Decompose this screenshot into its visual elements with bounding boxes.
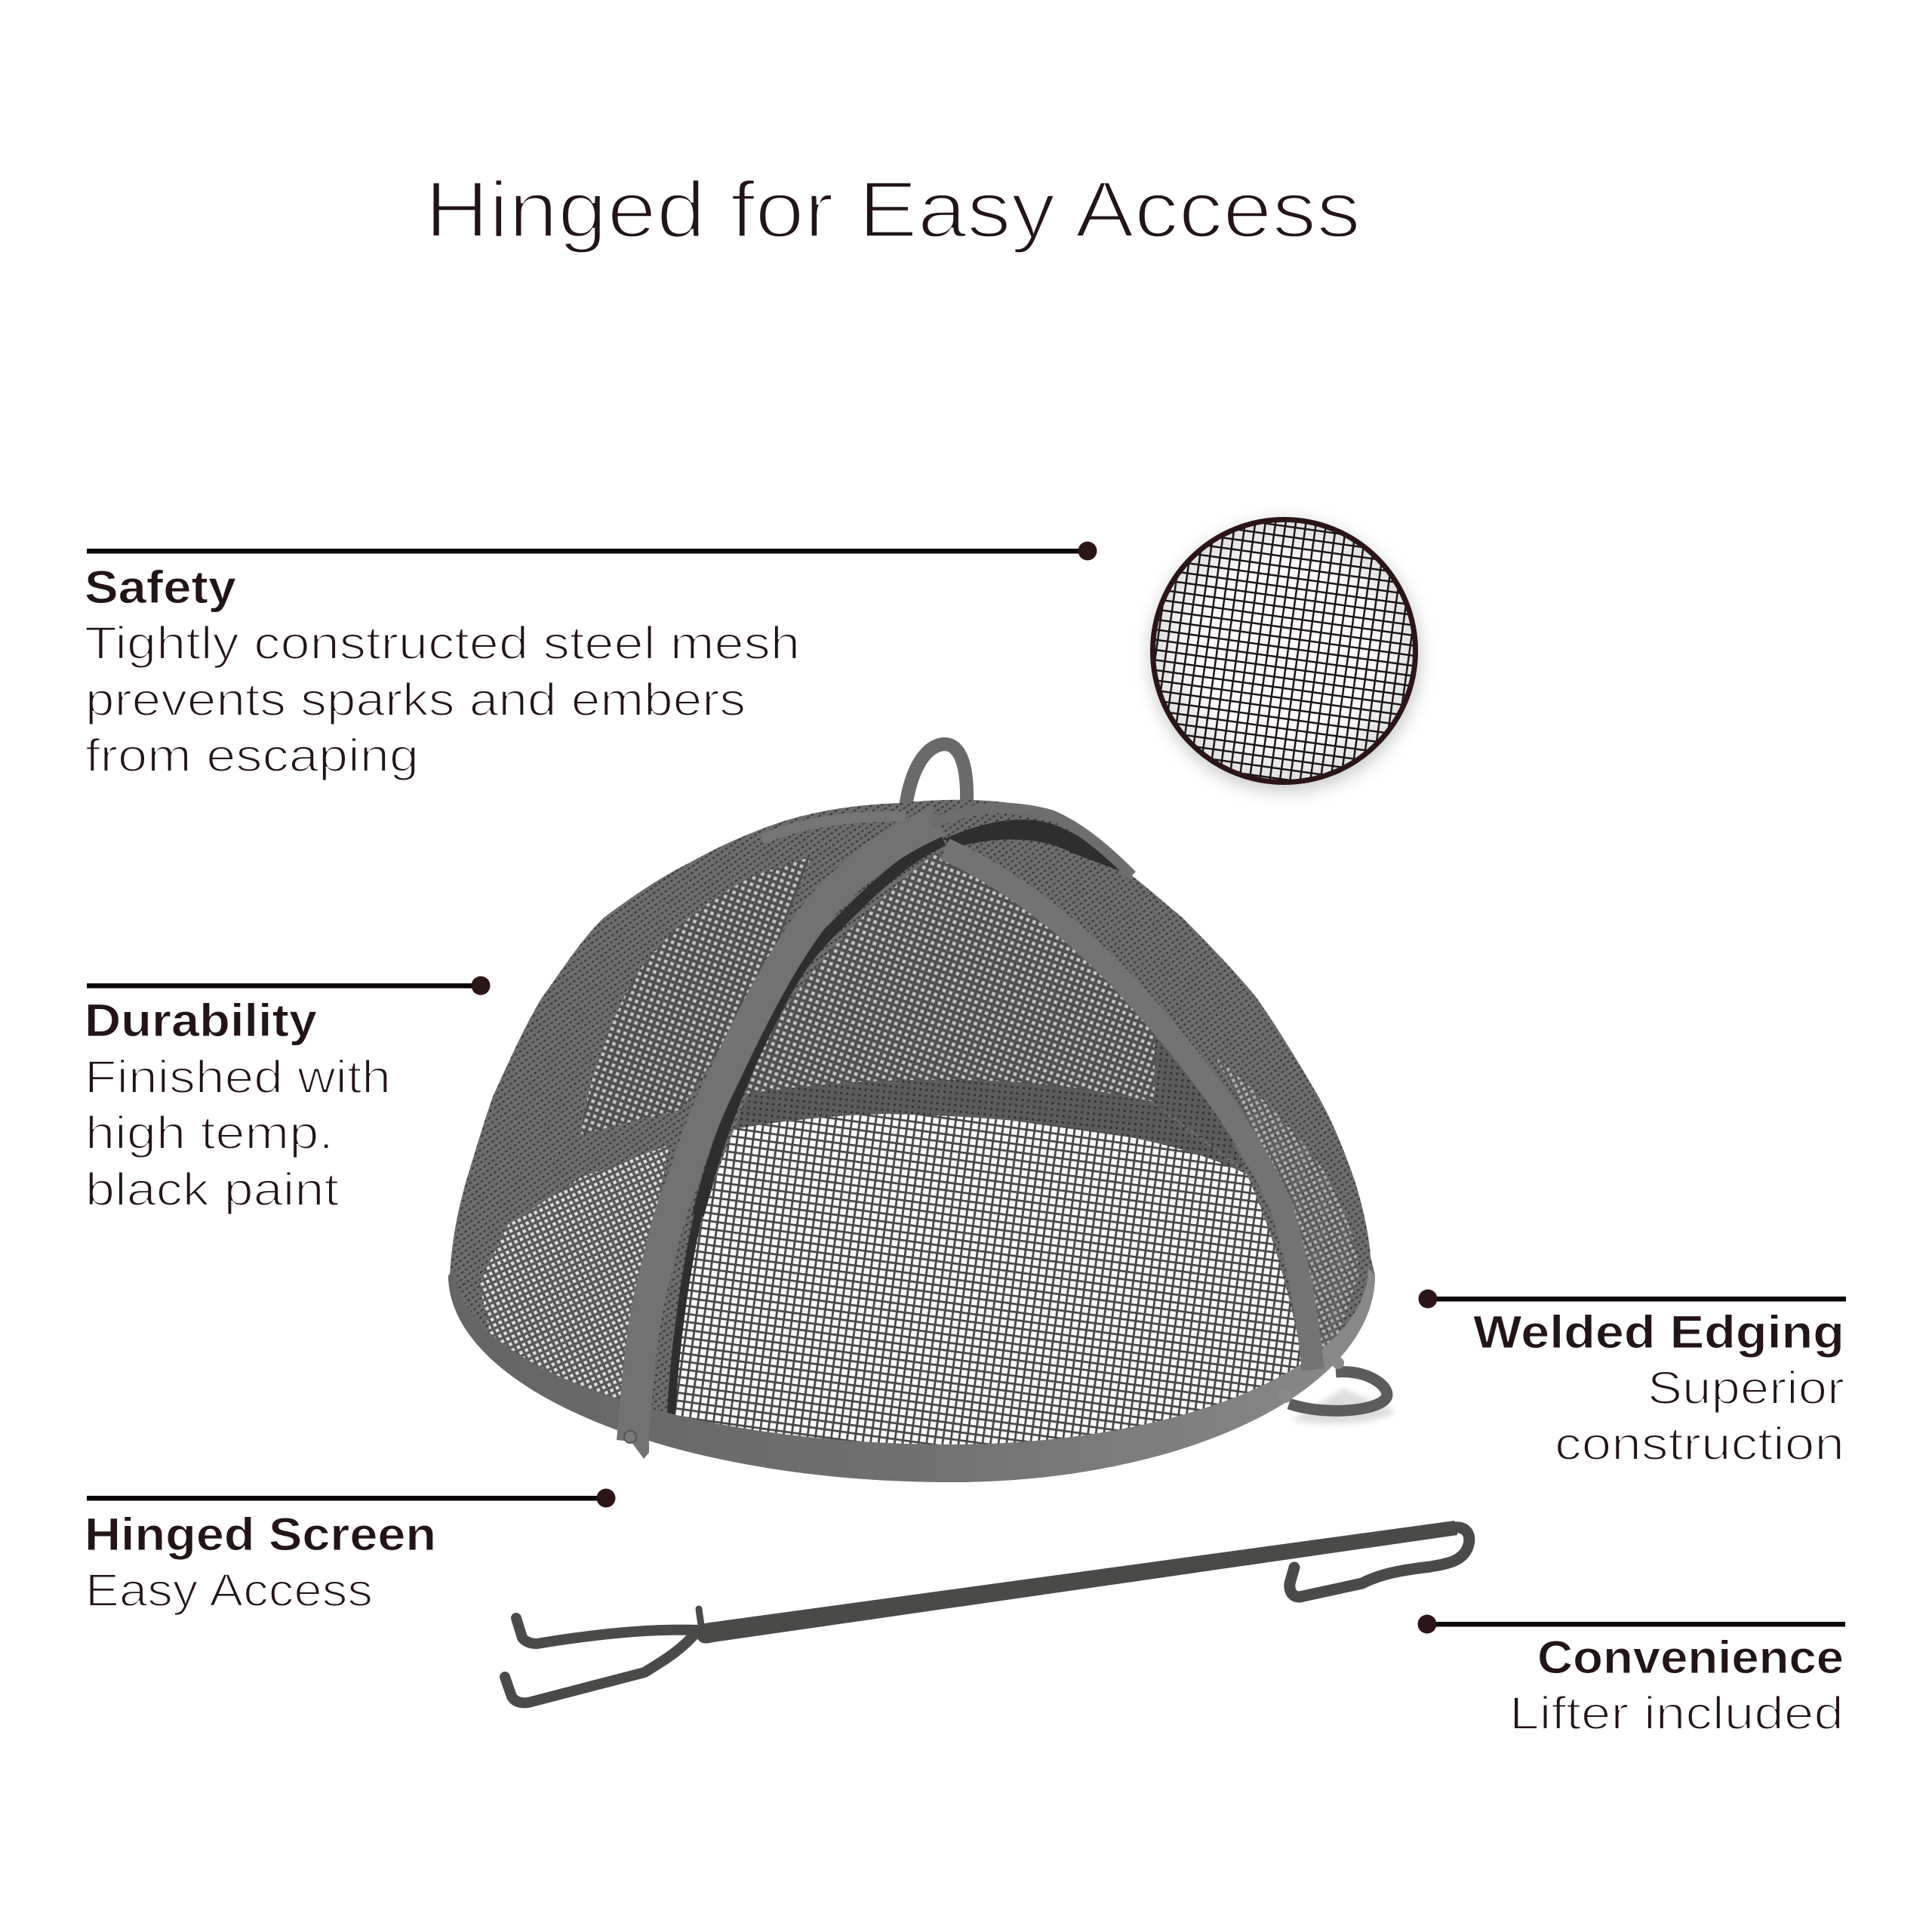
icon: side handle ring — [1289, 1372, 1387, 1411]
left hinged strap — [632, 821, 938, 1441]
text: durability description: black paint — [85, 1164, 339, 1215]
see-through lower left — [479, 1145, 669, 1426]
icon: top lift handle — [904, 744, 967, 830]
dome outer mesh — [448, 800, 1375, 1482]
top back rim strip — [762, 817, 906, 839]
hinge rivet — [624, 1431, 636, 1443]
door black frame upper — [698, 840, 943, 1215]
heading: welded edging: Welded Edging — [1473, 1306, 1844, 1358]
text: safety description: from escaping — [85, 730, 419, 781]
right side lighter mesh — [1215, 1057, 1358, 1358]
leader line: convenience — [1417, 1615, 1845, 1633]
heading: convenience: Convenience — [1537, 1632, 1844, 1683]
leader line: welded edging — [1419, 1289, 1846, 1309]
text: welded edging description: Superior — [1647, 1362, 1844, 1414]
door: upper double-layer mesh — [743, 853, 1155, 1102]
door: lower see-through mesh — [667, 1114, 1307, 1464]
top arc of strap — [932, 808, 1132, 875]
text: safety description — [85, 617, 800, 781]
text: durability description: Finished with — [85, 1051, 391, 1103]
title: Hinged for Easy Access — [425, 165, 1361, 254]
welded rim — [448, 1268, 1375, 1482]
text: hinged screen description: Easy Access — [85, 1564, 373, 1616]
right strap — [945, 849, 1313, 1370]
lifter hook — [1290, 1527, 1469, 1597]
shadow under lower handle — [1291, 1389, 1396, 1424]
upper prong — [516, 1618, 699, 1644]
callout: durability — [85, 977, 491, 1215]
heading: durability: Durability — [85, 995, 317, 1046]
leader line: durability — [87, 977, 491, 995]
callout: convenience — [1417, 1615, 1845, 1739]
text: safety description: prevents sparks and embers — [85, 674, 746, 725]
heading: safety: Safety — [85, 561, 236, 613]
callout: welded edging — [1419, 1289, 1846, 1469]
heading: hinged screen: Hinged Screen — [85, 1509, 436, 1560]
see-through window upper left — [581, 857, 811, 1134]
text: convenience description: Lifter included — [1509, 1687, 1844, 1739]
text: safety description: Tightly constructed steel mesh — [85, 617, 800, 669]
door: dark right corner — [1155, 1011, 1245, 1170]
lifter shaft — [696, 1521, 1457, 1644]
text: welded edging description — [1555, 1362, 1844, 1469]
door black frame lower — [671, 1215, 698, 1419]
back top dark arc — [943, 820, 1132, 875]
callout: hinged screen — [85, 1488, 616, 1616]
illustration: lifter tool — [505, 1521, 1469, 1703]
lower prong — [505, 1630, 698, 1703]
text: durability description: high temp. — [85, 1107, 334, 1158]
inset: mesh close-up circle — [1132, 506, 1434, 800]
handle welds — [1278, 1357, 1344, 1403]
spur — [699, 1609, 702, 1630]
text: durability description — [85, 1051, 391, 1215]
leader line: hinged screen — [87, 1488, 616, 1508]
leader line: safety — [87, 542, 1097, 560]
text: welded edging description: construction — [1555, 1418, 1844, 1469]
hinge tip — [617, 1423, 649, 1459]
callout: safety — [85, 542, 1097, 781]
illustration: hinged mesh dome screen — [448, 744, 1396, 1482]
door: rear rim band through mesh — [734, 1080, 1247, 1174]
